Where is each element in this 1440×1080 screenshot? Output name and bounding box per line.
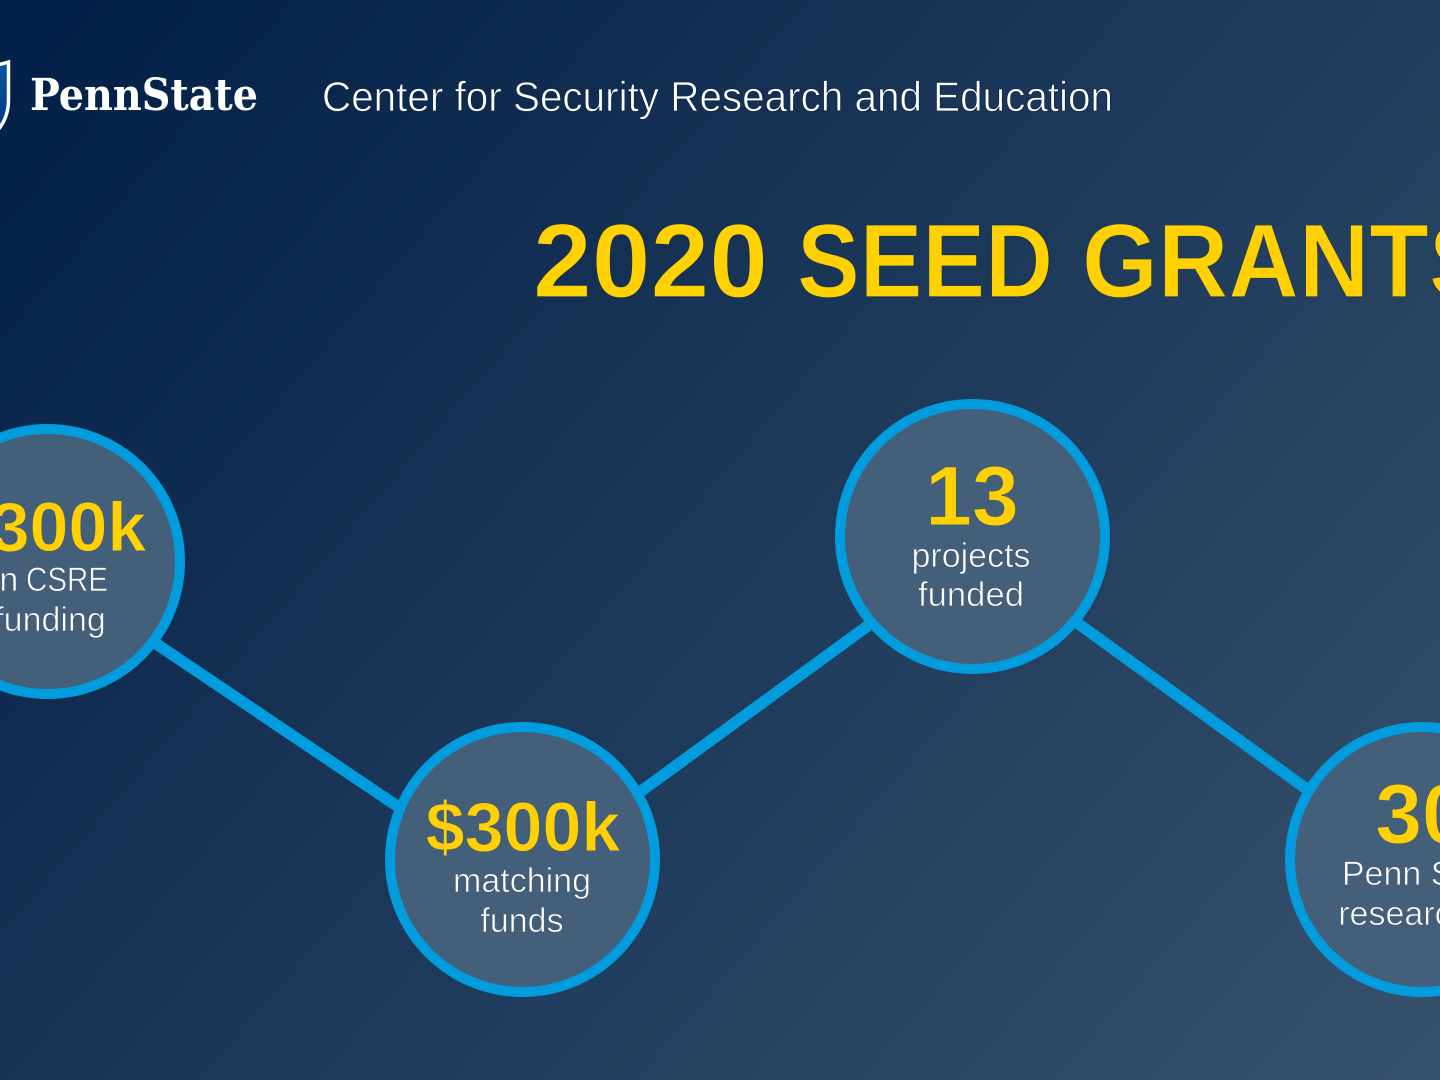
stat: matching funds: funds — [480, 902, 564, 940]
icon: Penn State shield — [0, 62, 8, 131]
stat: projects funded: 13 — [925, 449, 1019, 543]
stat: Penn State researchers — [1290, 727, 1440, 992]
stat: matching funds: matching — [453, 862, 591, 900]
stat: projects funded — [840, 404, 1105, 669]
Penn State wordmark: PennState — [30, 70, 258, 121]
stat: matching funds — [390, 727, 655, 992]
connector lines — [155, 622, 1308, 808]
title — [533, 203, 1440, 320]
stat: matching funds: $300k — [426, 788, 620, 866]
title: 2020 — [533, 203, 768, 320]
stat: projects funded: funded — [918, 576, 1024, 614]
title: SEED — [797, 203, 1053, 320]
stat: CSRE funding: CSRE — [26, 561, 108, 599]
header — [0, 62, 1113, 131]
stat: projects funded: projects — [911, 537, 1031, 575]
center name: Center for Security Research and Education — [322, 73, 1113, 120]
stat: CSRE funding — [0, 429, 180, 694]
